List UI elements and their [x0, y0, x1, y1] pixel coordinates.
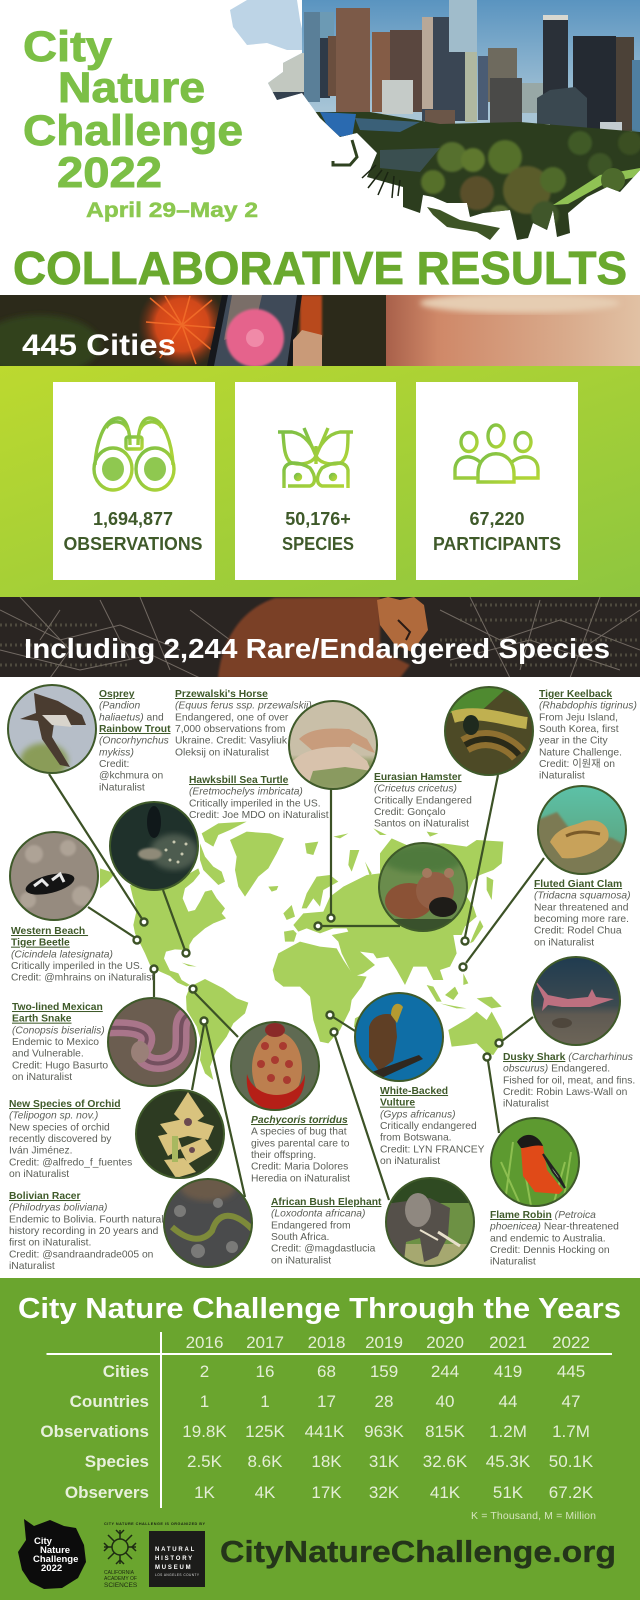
logo: California Academy of Sciences: ACADEMY OF: [104, 1576, 137, 1582]
text: Dusky Shark: obscurus): [503, 1064, 548, 1075]
text: Pachycoris torridus: Heredia on iNaturalist: [251, 1173, 350, 1184]
text: African Bush Elephant: Credit: @magdastlucia: [271, 1244, 376, 1255]
table: yearly results: Cities: [103, 1362, 149, 1381]
card: participants: 67,220: [469, 509, 525, 529]
table: yearly results: 67.2K: [549, 1483, 594, 1502]
table: yearly results: Observers: [65, 1483, 149, 1502]
title: City Nature Challenge 2022: April 29–May 2: [86, 199, 258, 222]
logo: City Nature Challenge 2022: 2022: [41, 1563, 62, 1574]
logo: Natural History Museum: MUSEUM: [155, 1565, 192, 1571]
table: yearly results: 2017: [246, 1333, 284, 1352]
table: yearly results: 45.3K: [486, 1452, 531, 1471]
table: yearly results: 40: [436, 1392, 454, 1411]
table: yearly results: 1: [260, 1392, 270, 1411]
photo: Telipogon orchid: [135, 1089, 225, 1179]
table: yearly results: 17K: [311, 1483, 342, 1502]
text: African Bush Elephant: on iNaturalist: [271, 1255, 331, 1266]
text: Hawksbill Sea Turtle: Credit: Joe MDO on iNaturalist: [189, 810, 329, 821]
table: yearly results: 963K: [364, 1422, 405, 1441]
text: New Species of Orchid: Iván Jiménez.: [9, 1146, 73, 1157]
photo: Los Angeles skyline blending into trees: [230, 0, 640, 250]
table: yearly results: 2016: [186, 1333, 223, 1352]
logo: Natural History Museum: LOS ANGELES COUNTY: [155, 1573, 200, 1577]
table: yearly results: 1K: [194, 1483, 216, 1502]
text: Bolivian Racer: Credit: @sandraandrade005 on: [9, 1249, 154, 1260]
table: yearly results: 32K: [369, 1483, 400, 1502]
card: species: SPECIES: [282, 534, 354, 554]
text: Tiger Keelback: South Korea, first: [539, 724, 619, 735]
table: yearly results: 2: [200, 1362, 209, 1381]
table: yearly results: 244: [431, 1362, 459, 1381]
text: Bolivian Racer: history recording in 20 years and: [9, 1226, 159, 1237]
logo: California Academy of Sciences: [104, 1530, 138, 1589]
text: Bolivian Racer: Endemic to Bolivia. Fourth natural: [9, 1214, 164, 1225]
logo: California Academy of Sciences: SCIENCES: [104, 1582, 138, 1589]
text: Hawksbill Sea Turtle: (Eretmochelys imbricata): [189, 787, 303, 798]
banner: rare and endangered species: [0, 597, 640, 678]
text: Pachycoris torridus: gives parental care to: [251, 1138, 350, 1149]
table: yearly results: 50.1K: [549, 1452, 594, 1471]
icon: butterfly: [278, 428, 353, 488]
text: New Species of Orchid: on iNaturalist: [9, 1169, 69, 1180]
website URL: CityNatureChallenge.org: [220, 1534, 616, 1569]
text: Dusky Shark: [503, 1052, 635, 1110]
text: New Species of Orchid: recently discovered by: [9, 1134, 112, 1145]
text: Western Beach Tiger Beetle: (Cicindela latesignata): [11, 949, 113, 960]
table: yearly results: 419: [494, 1362, 522, 1381]
text: African Bush Elephant: Endangered from: [271, 1220, 351, 1231]
text: Western Beach Tiger Beetle: Tiger Beetle: [11, 938, 70, 949]
text: New Species of Orchid: (Telipogon sp. nov.): [9, 1111, 98, 1122]
table: yearly results: 32.6K: [423, 1452, 468, 1471]
text: Flame Robin: and endemic to Australia.: [490, 1233, 606, 1244]
banner: 445 Cities: [0, 295, 640, 366]
title: City Nature Challenge 2022: 2022: [57, 149, 162, 197]
table: yearly results: 2018: [308, 1333, 345, 1352]
text: Tiger Keelback: iNaturalist: [539, 771, 585, 782]
text: Osprey and Rainbow Trout: iNaturalist: [99, 782, 145, 793]
text: Two-lined Mexican Earth Snake: Two-lined Mexican: [12, 1002, 103, 1013]
card: observations: OBSERVATIONS: [64, 534, 202, 554]
photo: Western beach tiger beetle: [9, 831, 99, 921]
logo: City Nature Challenge 2022: [18, 1519, 86, 1589]
icon: people: [455, 425, 538, 482]
card: participants: [416, 382, 578, 580]
text: New Species of Orchid: [9, 1099, 132, 1180]
text: Bolivian Racer: [9, 1191, 164, 1272]
table: yearly results: 8.6K: [248, 1452, 283, 1471]
text: Przewalski's Horse: Przewalski's Horse: [175, 689, 268, 700]
text: Eurasian Hamster: [374, 772, 472, 830]
text: Osprey and Rainbow Trout: Rainbow Trout: [99, 724, 171, 735]
title: City Nature Challenge 2022: City: [23, 23, 112, 71]
photo: African bush elephant: [385, 1177, 475, 1268]
text: Osprey and Rainbow Trout: [99, 689, 171, 793]
table: yearly results: 441K: [305, 1422, 345, 1441]
text: Przewalski's Horse: (Equus ferus ssp. przewalskii): [175, 701, 312, 712]
text: Flame Robin: Credit: Dennis Hocking on: [490, 1245, 610, 1256]
text: Western Beach Tiger Beetle: Credit: @mhrains on iNaturalist: [11, 973, 154, 984]
logo: City Nature Challenge 2022: City: [34, 1536, 53, 1547]
text: Dusky Shark: Fished for oil, meat, and fins.: [503, 1075, 635, 1086]
text: Western Beach Tiger Beetle: [11, 926, 154, 984]
photo: White-backed vulture: [354, 992, 444, 1082]
text: Hawksbill Sea Turtle: Critically imperiled in the US.: [189, 798, 321, 809]
table: yearly results: 19.8K: [182, 1422, 227, 1441]
text: Przewalski's Horse: Ukraine. Credit: Vasyliuk: [175, 736, 288, 747]
text: Tiger Keelback: From Jeju Island,: [539, 712, 618, 723]
table: yearly results: 159: [370, 1362, 398, 1381]
panel: key stats: [0, 366, 640, 597]
text: Pachycoris torridus: their offspring.: [251, 1150, 316, 1161]
text: Fluted Giant Clam: on iNaturalist: [534, 937, 594, 948]
text: African Bush Elephant: (Loxodonta africana): [271, 1209, 365, 1220]
table: yearly results: 31K: [369, 1452, 400, 1471]
photo: Dusky shark: [531, 956, 621, 1046]
text: Two-lined Mexican Earth Snake: and Vulnerable.: [12, 1049, 84, 1060]
table: yearly results: Species: [85, 1452, 149, 1471]
text: Bolivian Racer: (Philodryas boliviana): [9, 1203, 107, 1214]
table: yearly results: 445: [557, 1362, 585, 1381]
text: Fluted Giant Clam: Credit: Rodel Chua: [534, 926, 622, 937]
card: species: [235, 382, 396, 580]
text: Two-lined Mexican Earth Snake: Endemic to Mexico: [12, 1037, 99, 1048]
photo: Fluted giant clam: [537, 785, 627, 876]
text: Western Beach Tiger Beetle: Critically imperiled in the US.: [11, 961, 143, 972]
text: New Species of Orchid: Credit: @alfredo_f_fuentes: [9, 1157, 132, 1168]
text: Osprey and Rainbow Trout: @kchmura on: [99, 771, 164, 782]
table: yearly results: 68: [317, 1362, 336, 1381]
title: City Nature Challenge 2022: Nature: [58, 64, 205, 112]
text: Osprey and Rainbow Trout: Credit:: [99, 759, 129, 770]
table: yearly results: 815K: [425, 1422, 466, 1441]
text: Fluted Giant Clam: (Tridacna squamosa): [534, 891, 631, 902]
text: Dusky Shark: (Carcharhinus: [565, 1052, 633, 1063]
logo: City Nature Challenge 2022: Nature: [40, 1545, 70, 1556]
heading: Collaborative Results: COLLABORATIVE RESULTS: [13, 242, 627, 294]
text: Two-lined Mexican Earth Snake: Credit: Hugo Basurto: [12, 1060, 108, 1071]
text: Flame Robin: [489, 1210, 619, 1268]
banner text: Including 2,244 Rare/Endangered Species: [24, 633, 610, 664]
logo: Natural History Museum: [149, 1531, 205, 1587]
text: White-Backed Vulture: from Botswana.: [380, 1133, 452, 1144]
text: Osprey and Rainbow Trout: mykiss): [99, 747, 134, 758]
table: yearly results: 1: [200, 1392, 209, 1411]
table: yearly results: 16: [256, 1362, 274, 1381]
text: Eurasian Hamster: Santos on iNaturalist: [374, 819, 469, 830]
title: City Nature Challenge 2022: [23, 23, 258, 222]
text: Bolivian Racer: Bolivian Racer: [9, 1191, 81, 1202]
text: Tiger Keelback: Tiger Keelback: [539, 689, 612, 700]
text: Osprey and Rainbow Trout: (Pandion: [99, 701, 140, 712]
text: White-Backed Vulture: on iNaturalist: [380, 1156, 440, 1167]
text: Przewalski's Horse: Oleksij on iNaturalist: [175, 747, 269, 758]
table: yearly results: 41K: [430, 1483, 461, 1502]
text: White-Backed Vulture: White-Backed: [380, 1086, 448, 1097]
table: yearly results: 4K: [255, 1483, 276, 1502]
text: Bolivian Racer: first on iNaturalist.: [9, 1238, 91, 1249]
text: Eurasian Hamster: Eurasian Hamster: [374, 772, 462, 783]
text: Przewalski's Horse: Endangered, one of over: [175, 712, 289, 723]
text: Hawksbill Sea Turtle: Hawksbill Sea Turtle: [189, 775, 289, 786]
world map: [100, 822, 503, 1080]
text: Dusky Shark: Credit: Robin Laws-Wall on: [503, 1087, 628, 1098]
text: Two-lined Mexican Earth Snake: (Conopsis biserialis): [12, 1025, 105, 1036]
card: observations: 1,694,877: [93, 509, 173, 529]
photo: Bolivian racer: [163, 1173, 253, 1268]
text: Fluted Giant Clam: becoming more rare.: [534, 914, 629, 925]
photo: Tiger keelback: [444, 686, 534, 776]
text: Flame Robin: phoenicea): [489, 1222, 541, 1233]
text: Tiger Keelback: (Rhabdophis tigrinus): [539, 701, 637, 712]
text: African Bush Elephant: [271, 1197, 382, 1266]
text: Two-lined Mexican Earth Snake: on iNaturalist: [12, 1072, 72, 1083]
table: yearly results: 2021: [489, 1333, 527, 1352]
photo: Flame robin: [490, 1117, 580, 1207]
text: Dusky Shark: Dusky Shark: [503, 1052, 566, 1063]
logo: Natural History Museum: HISTORY: [155, 1556, 194, 1562]
text: White-Backed Vulture: Vulture: [380, 1098, 415, 1109]
table: yearly results: 51K: [493, 1483, 524, 1502]
text: Flame Robin: iNaturalist: [490, 1257, 536, 1268]
text: Flame Robin: (Petroica: [552, 1210, 596, 1221]
text: Pachycoris torridus: Pachycoris torridus: [251, 1115, 348, 1126]
text: Pachycoris torridus: A species of bug that: [251, 1127, 347, 1138]
text: Eurasian Hamster: Credit: Gonçalo: [374, 807, 446, 818]
text: New Species of Orchid: New Species of Orchid: [9, 1099, 121, 1110]
card: species: 50,176+: [285, 509, 351, 529]
text: Przewalski's Horse: [175, 689, 312, 758]
table: yearly results: 28: [375, 1392, 393, 1411]
photo: osprey: [7, 684, 97, 779]
text: African Bush Elephant: African Bush Elephant: [271, 1197, 382, 1208]
table: yearly results: [40, 1332, 612, 1508]
table: yearly results: 1.2M: [489, 1422, 527, 1441]
text: New Species of Orchid: New species of orchid: [9, 1122, 110, 1133]
text: Hawksbill Sea Turtle: [189, 775, 329, 821]
table: yearly results: 18K: [311, 1452, 342, 1471]
text: White-Backed Vulture: [380, 1086, 485, 1167]
table: yearly results: 1.7M: [552, 1422, 590, 1441]
card: observations: [53, 382, 215, 580]
photo: Hawksbill sea turtle: [109, 801, 199, 891]
logo: California Academy of Sciences: CALIFORNIA: [104, 1570, 135, 1576]
table: yearly results: 125K: [245, 1422, 286, 1441]
text: Tiger Keelback: Nature Challenge.: [539, 747, 622, 758]
text: Eurasian Hamster: Critically Endangered: [374, 795, 472, 806]
text: Flame Robin: Flame Robin: [490, 1210, 552, 1221]
text: Przewalski's Horse: 7,000 observations from: [175, 724, 285, 735]
text: White-Backed Vulture: Credit: LYN FRANCEY: [380, 1144, 485, 1155]
text: organized by: CITY NATURE CHALLENGE IS ORGANIZED BY: [104, 1522, 205, 1526]
note: K and M legend: K = Thousand, M = Million: [471, 1510, 596, 1522]
text: Two-lined Mexican Earth Snake: [12, 1002, 108, 1083]
text: Osprey and Rainbow Trout: (Oncorhynchus: [99, 736, 169, 747]
table: yearly results: Observations: [40, 1422, 149, 1441]
icon: binoculars: [94, 418, 174, 490]
heading: Through the Years: City Nature Challenge Through the Years: [18, 1293, 621, 1325]
text: Bolivian Racer: iNaturalist: [9, 1261, 55, 1272]
text: Fluted Giant Clam: [534, 879, 631, 948]
text: Pachycoris torridus: [251, 1115, 350, 1184]
text: Osprey and Rainbow Trout: Osprey: [99, 689, 135, 700]
text: Eurasian Hamster: (Cricetus cricetus): [374, 784, 457, 795]
text: Fluted Giant Clam: Near threatened and: [534, 902, 629, 913]
text: White-Backed Vulture: (Gyps africanus): [380, 1109, 456, 1120]
text: Osprey and Rainbow Trout: haliaetus): [99, 712, 144, 723]
logo: Natural History Museum: NATURAL: [155, 1547, 196, 1553]
photo: Two-lined Mexican earth snake: [107, 997, 197, 1087]
banner text: 445 Cities: [22, 329, 176, 362]
logo: City Nature Challenge 2022: Challenge: [33, 1554, 78, 1565]
card: participants: PARTICIPANTS: [433, 534, 561, 554]
photo: Przewalski's horses: [288, 700, 378, 791]
text: Flame Robin: Near-threatened: [541, 1222, 619, 1233]
table: yearly results: 44: [499, 1392, 517, 1411]
table: yearly results: 47: [562, 1392, 580, 1411]
text: Osprey and Rainbow Trout: and: [144, 712, 164, 723]
table: yearly results: 17: [317, 1392, 336, 1411]
title: City Nature Challenge 2022: Challenge: [23, 107, 243, 155]
photo: Pachycoris torridus: [230, 1021, 320, 1111]
photo: Eurasian hamster: [378, 842, 468, 933]
panel: through the years: [0, 1278, 640, 1600]
text: Dusky Shark: iNaturalist: [503, 1099, 549, 1110]
text: Fluted Giant Clam: Fluted Giant Clam: [534, 879, 622, 890]
text: Tiger Keelback: year in the City: [539, 736, 609, 747]
table: yearly results: 2.5K: [187, 1452, 223, 1471]
text: Western Beach Tiger Beetle: Western Beach: [11, 926, 88, 937]
text: Pachycoris torridus: Credit: Maria Dolores: [251, 1162, 348, 1173]
table: yearly results: 2022: [552, 1333, 590, 1352]
connector lines and location dots: [49, 774, 544, 1200]
text: Tiger Keelback: Credit: 이원재 on: [539, 758, 615, 770]
text: White-Backed Vulture: Critically endangered: [380, 1121, 477, 1132]
table: yearly results: 2019: [365, 1333, 403, 1352]
text: African Bush Elephant: South Africa.: [271, 1232, 329, 1243]
table: yearly results: 2020: [426, 1333, 464, 1352]
table: yearly results: Countries: [70, 1392, 149, 1411]
text: Dusky Shark: Endangered.: [548, 1064, 610, 1075]
text: Two-lined Mexican Earth Snake: Earth Snake: [12, 1014, 72, 1025]
text: Tiger Keelback: [539, 689, 637, 782]
